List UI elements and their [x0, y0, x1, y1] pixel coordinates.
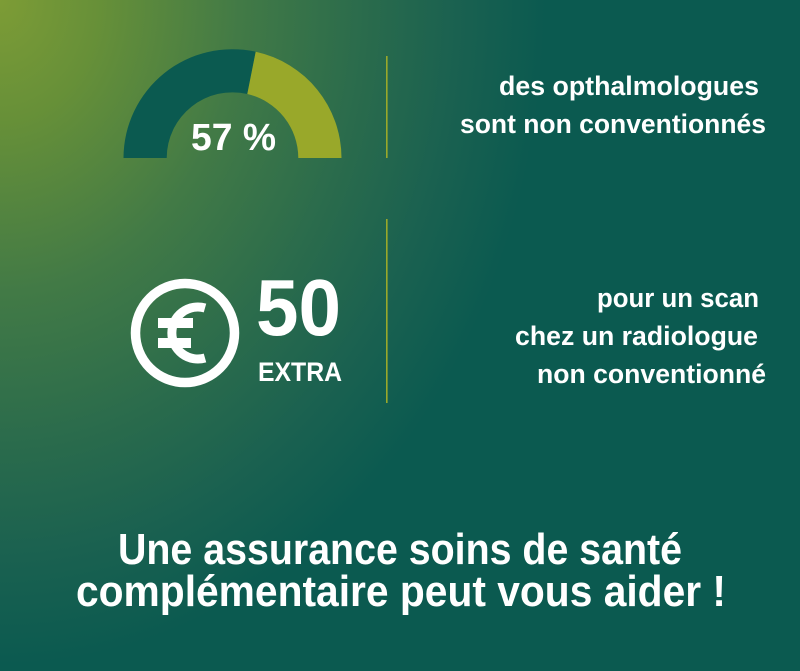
closing statement: complémentaire peut vous aider !	[76, 567, 726, 616]
text: ophthalmologists: sont non conventionnés	[460, 109, 766, 139]
text: radiologist scan: non conventionné	[537, 359, 766, 389]
text: ophthalmologists: des opthalmologues	[499, 71, 759, 101]
gauge value: 57 %	[191, 117, 276, 159]
divider: top	[386, 56, 388, 158]
amount: 50 extra: 50	[256, 263, 341, 352]
closing statement	[76, 525, 726, 616]
text: ophthalmologists	[460, 71, 766, 139]
gauge segment: olive	[247, 52, 342, 158]
amount: 50 extra: EXTRA	[258, 357, 342, 387]
gauge chart: 57 %	[124, 49, 342, 159]
text: radiologist scan	[515, 283, 766, 389]
text: radiologist scan: pour un scan	[597, 283, 759, 313]
closing statement: Une assurance soins de santé	[118, 525, 682, 574]
icon: euro coin	[136, 284, 234, 382]
text: radiologist scan: chez un radiologue	[515, 321, 758, 351]
divider: middle	[386, 219, 388, 403]
gauge segment: dark teal	[124, 49, 256, 158]
